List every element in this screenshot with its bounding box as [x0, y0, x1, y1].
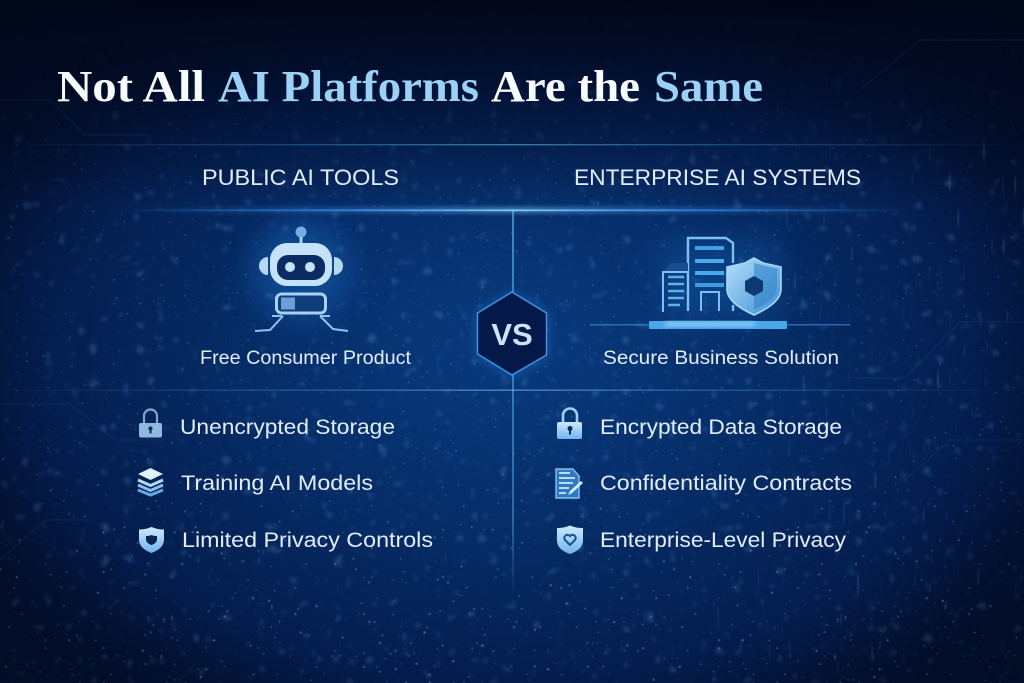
icon: office building with shield	[590, 238, 850, 329]
heading: enterprise AI systems: ENTERPRISE AI SYSTEMS	[574, 165, 861, 190]
title: Are the	[491, 61, 640, 111]
icon: stacked layers	[138, 468, 163, 495]
icon: padlock	[139, 410, 162, 438]
icon: shield	[139, 527, 164, 553]
label: free consumer product: Free Consumer Product	[200, 348, 412, 369]
title: Same	[654, 61, 763, 111]
text: enterprise-level privacy: Enterprise-Level Privacy	[600, 528, 846, 552]
center vertical divider	[512, 211, 514, 596]
icon: shield with heart	[557, 526, 583, 554]
title: AI Platforms	[218, 61, 479, 111]
text: unencrypted storage: Unencrypted Storage	[180, 415, 395, 439]
VS badge	[477, 292, 547, 376]
list: enterprise AI systems	[556, 409, 852, 554]
VS badge: VS	[491, 317, 533, 352]
text: limited privacy controls: Limited Privacy Controls	[182, 528, 433, 552]
text: training AI models: Training AI Models	[181, 471, 373, 495]
icon: contract document	[556, 469, 583, 498]
label: secure business solution: Secure Business Solution	[603, 348, 839, 369]
text: encrypted data storage: Encrypted Data Storage	[600, 415, 842, 439]
horizontal divider lines	[0, 144, 1024, 391]
icon: padlock bright	[557, 409, 582, 439]
text: confidentiality contracts: Confidentiality Contracts	[600, 471, 852, 495]
heading: public AI tools: PUBLIC AI TOOLS	[202, 165, 399, 190]
title: Not All	[57, 61, 205, 111]
icon: robot	[251, 220, 351, 331]
list: public AI tools	[138, 410, 433, 553]
